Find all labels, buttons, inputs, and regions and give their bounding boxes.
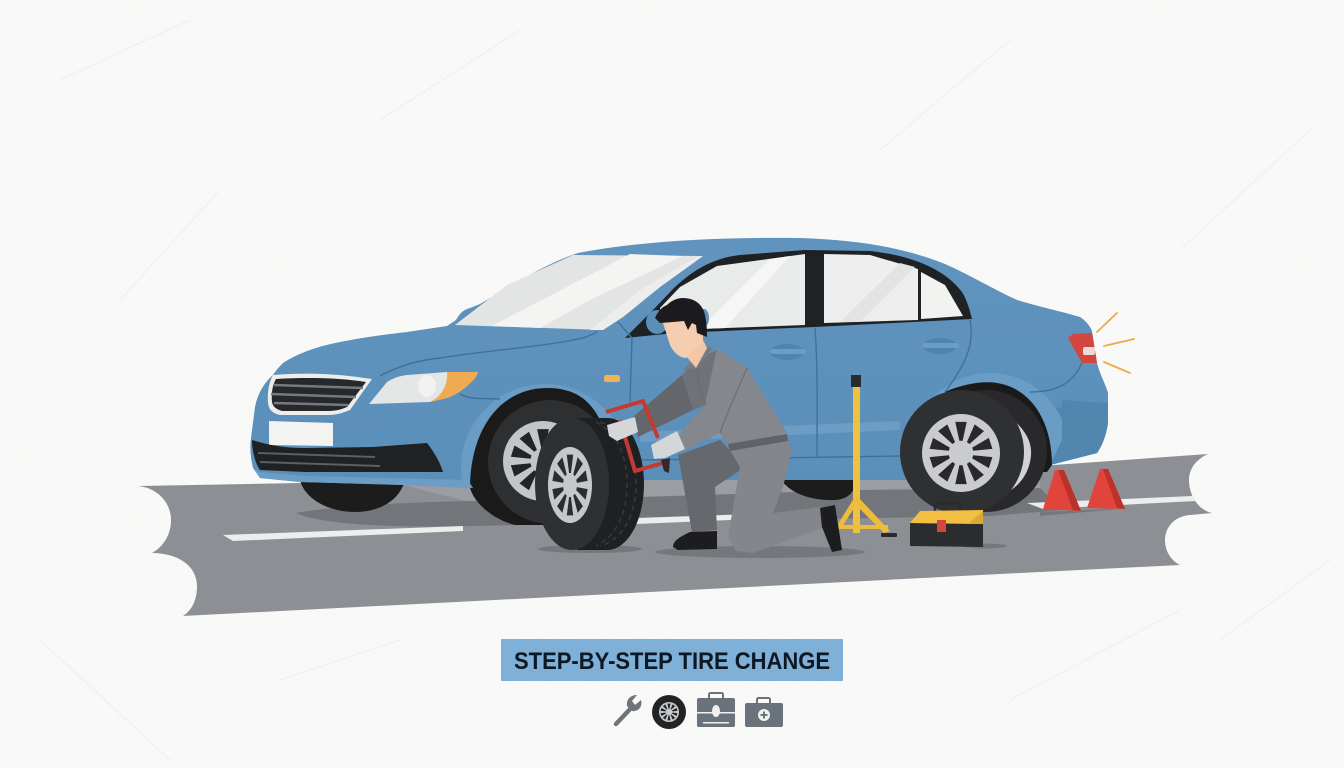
lower body shading	[1050, 403, 1108, 465]
side window frame	[625, 250, 972, 338]
front side window	[660, 254, 805, 330]
middle side window	[824, 254, 918, 323]
jack stand	[838, 375, 897, 537]
collar	[683, 346, 713, 370]
lower air intake	[252, 440, 443, 472]
wrench	[606, 401, 663, 471]
icon: tire	[652, 695, 686, 729]
road	[138, 454, 1212, 616]
front tire on car	[488, 400, 612, 524]
icon: toolbox	[697, 693, 735, 727]
icon row	[616, 693, 783, 729]
rear side window	[921, 272, 963, 319]
far-side front wheel	[300, 480, 405, 512]
title banner	[501, 639, 843, 681]
front wheel arch	[461, 384, 612, 483]
rear tire	[900, 390, 1024, 514]
rear wheel arch	[934, 373, 1068, 464]
back arm	[633, 375, 693, 437]
turn signal	[604, 375, 620, 382]
belt	[728, 434, 788, 451]
door handles	[770, 338, 959, 360]
light band under car	[403, 470, 1040, 502]
front leg	[728, 440, 825, 553]
icon: wrench	[616, 695, 641, 724]
front shoe	[820, 505, 842, 552]
back shoe	[673, 531, 717, 550]
wrench socket	[661, 458, 670, 473]
ground shadows	[538, 508, 1130, 558]
mechanic	[606, 298, 842, 553]
road lane markings	[223, 496, 1196, 541]
grille	[268, 374, 372, 415]
license plate	[269, 421, 333, 446]
garment seams	[697, 368, 747, 433]
face	[663, 315, 703, 358]
gloves	[607, 417, 638, 441]
car	[250, 238, 1108, 552]
loose tire	[535, 418, 644, 550]
tail lamp rays	[1097, 313, 1134, 373]
blue mirror behind head	[699, 309, 709, 327]
icon: first aid kit	[745, 698, 783, 727]
tail lamp	[1068, 333, 1097, 363]
bumper highlight	[253, 468, 473, 488]
toolbox	[910, 503, 983, 547]
hair	[655, 298, 707, 337]
title text: STEP-BY-STEP TIRE CHANGE	[514, 648, 830, 675]
neck	[686, 340, 707, 368]
far-side rear wheel	[780, 478, 856, 500]
side mirror	[646, 310, 668, 334]
car body	[250, 238, 1108, 488]
headlight	[369, 372, 478, 404]
rear second tire and crescent	[925, 390, 1047, 512]
windshield	[455, 255, 703, 330]
traffic cones	[1043, 469, 1125, 511]
under-car shadow band	[296, 488, 1062, 527]
torso and front arm	[677, 348, 787, 450]
chest	[682, 350, 717, 410]
back leg	[678, 440, 745, 532]
door seams	[380, 320, 1082, 460]
